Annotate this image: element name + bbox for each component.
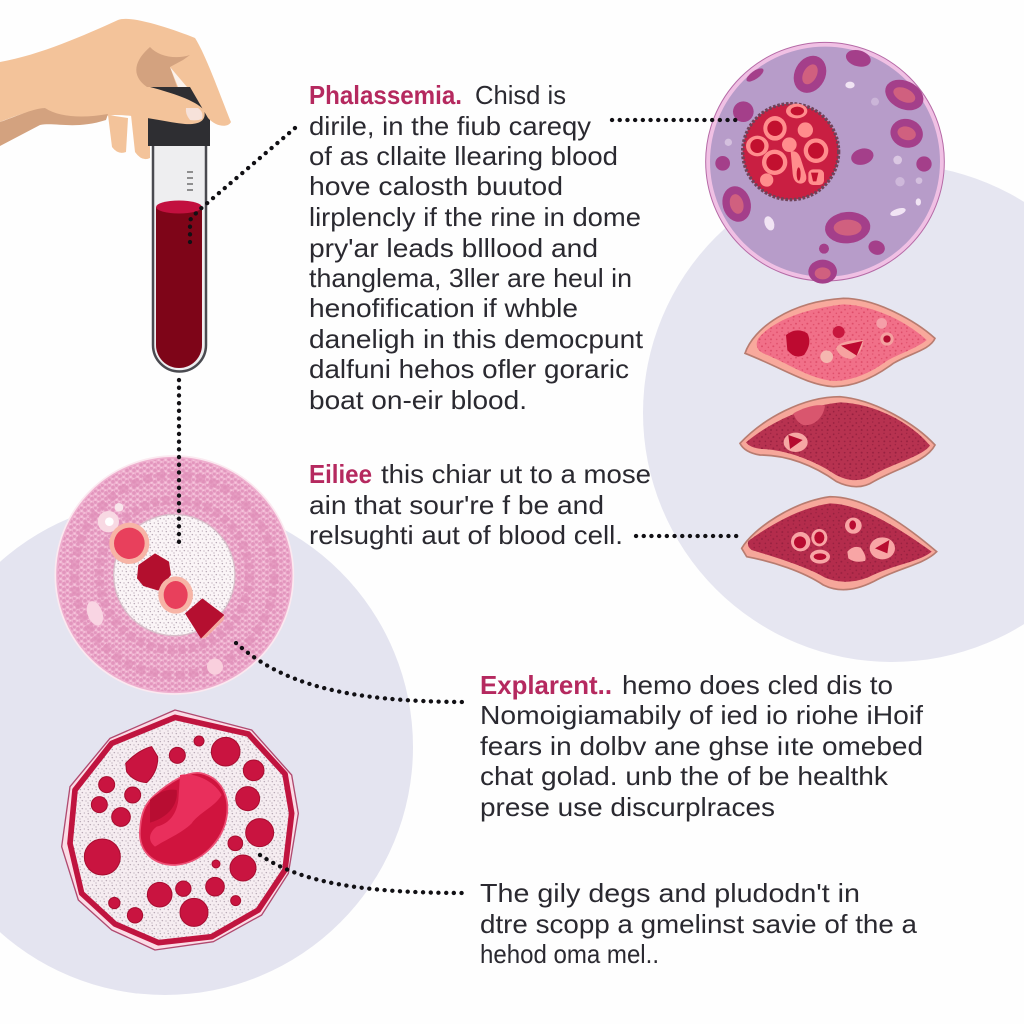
text block: closing note: dtre scopp a gmelinst savie of the a: [480, 909, 918, 939]
text block: Phalassemia: lirplencly if the rine in dome: [309, 202, 641, 232]
micrograph: round cell with nucleus: [62, 710, 298, 950]
micrograph: purple cell circle: [706, 42, 944, 284]
text block: Eiliee: ain that sour're f be and: [309, 490, 604, 520]
text block: closing note: hehod oma mel..: [480, 939, 659, 969]
text block: closing note: [480, 878, 918, 969]
text block: Explarent: Nomoigiamabily of ied io riohe iHoif: [480, 700, 924, 730]
text block: Eiliee: this chiar ut to a mose: [381, 459, 651, 489]
micrograph: pink tissue circle: [55, 456, 293, 694]
hand: rear fingers: [108, 115, 150, 159]
tissue section 3: [742, 497, 937, 590]
text block: closing note: The gily degs and pludodn't in: [480, 878, 860, 908]
text block: Explarent: [480, 670, 924, 822]
text block: Phalassemia: Chisd is: [475, 80, 566, 110]
text block: Phalassemia: of as cllaite llearing blood: [309, 141, 618, 171]
text block: Explarent: prese use discurplraces: [480, 792, 775, 822]
text block: Phalassemia: dalfuni hehos ofler goraric: [309, 354, 629, 384]
text block: Phalassemia: thanglema, 3ller are heul in: [309, 263, 632, 293]
text block: Explarent: hemo does cled dis to: [622, 670, 893, 700]
text block: Explarent: chat golad. unb the of be healthk: [480, 761, 889, 791]
icon: hand holding test tube: [0, 19, 231, 372]
text block: Explarent: Explarent..: [480, 670, 612, 700]
text block: Eiliee: Eiliee: [309, 459, 372, 489]
test tube: [148, 87, 210, 372]
text block: Phalassemia: [309, 80, 644, 415]
tissue section 1: [745, 298, 935, 387]
text block: Phalassemia: henofification if whble: [309, 293, 578, 323]
text block: Eiliee: [309, 459, 651, 550]
text block: Eiliee: relsughti aut of blood cell.: [309, 520, 623, 550]
text block: Phalassemia: hove calosth buutod: [309, 171, 563, 201]
nucleus: [140, 773, 227, 865]
hand: main: [0, 19, 231, 126]
dotted leader lines: [179, 120, 742, 893]
background circle: upper right: [643, 164, 1024, 662]
text block: Phalassemia: daneligh in this democpunt: [309, 324, 644, 354]
text block: Explarent: fears in dolbv ane ghse iıte omebed: [480, 731, 923, 761]
text block: Phalassemia: boat on-eir blood.: [309, 385, 527, 415]
text block: Phalassemia: Phalassemia.: [309, 80, 462, 110]
background circle: lower left: [0, 499, 413, 995]
tissue section 2: [740, 397, 935, 487]
text block: Phalassemia: pry'ar leads blllood and: [309, 233, 598, 263]
text block: Phalassemia: dirile, in the fiub careqy: [309, 111, 591, 141]
